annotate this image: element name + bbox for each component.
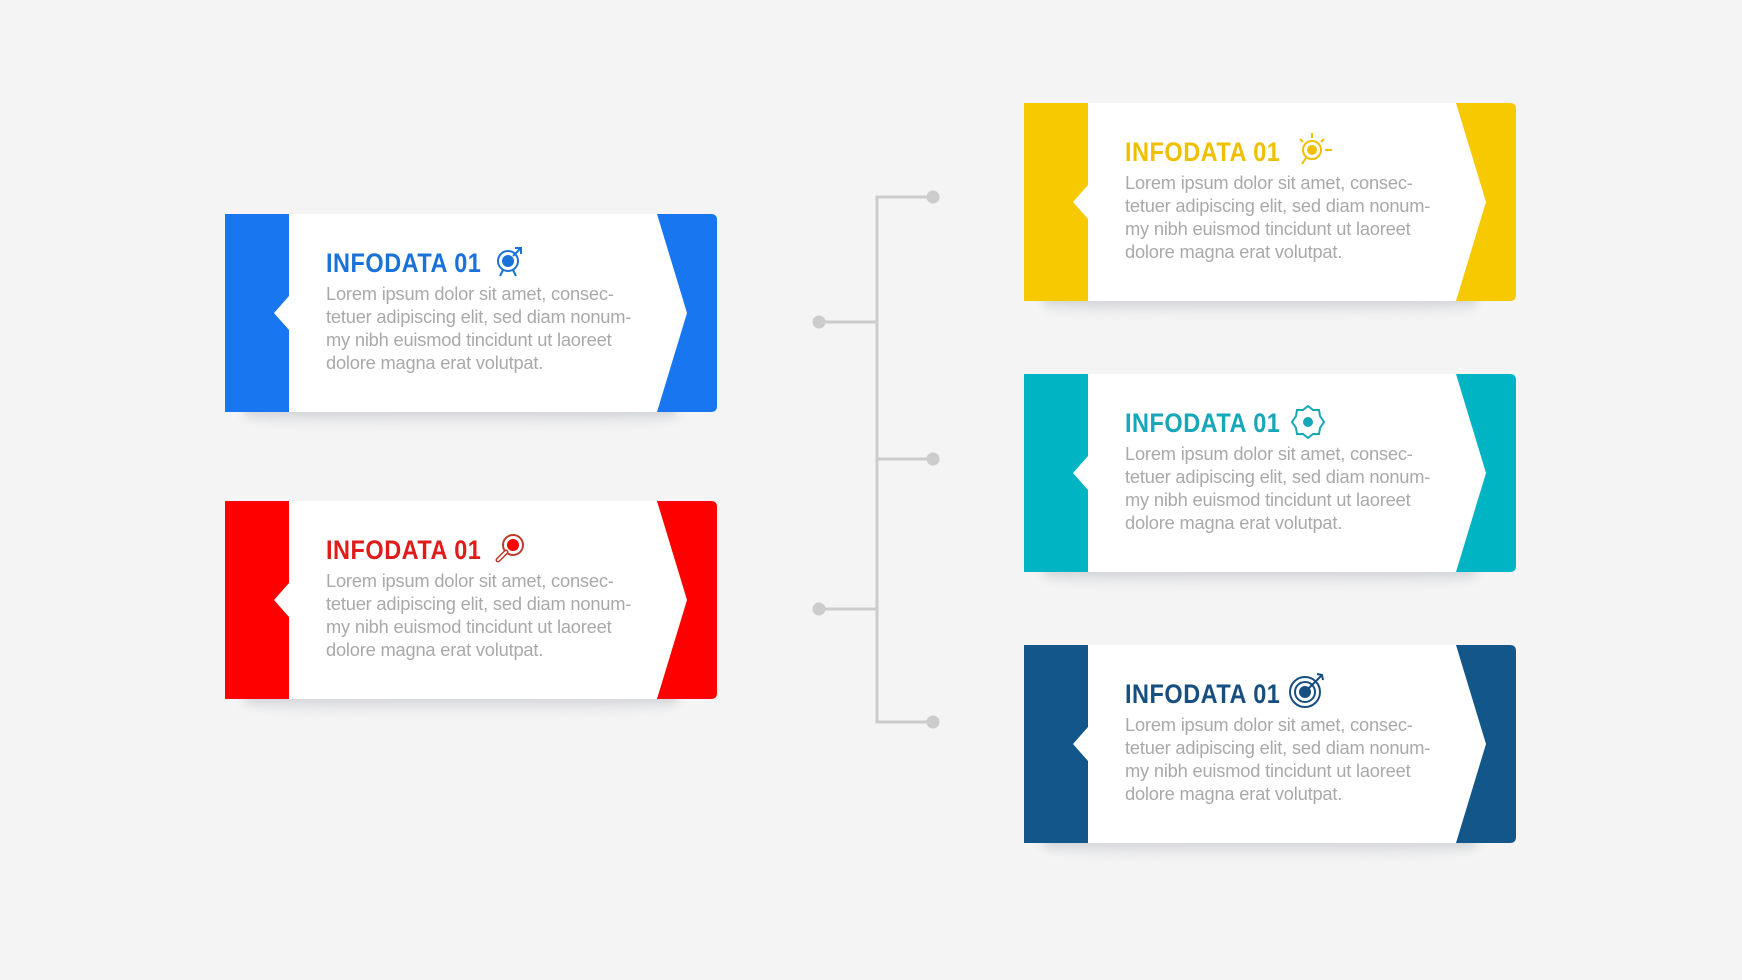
text: dolore magna erat volutpat. — [1125, 241, 1342, 262]
text: tetuer adipiscing elit, sed diam nonum- — [1125, 466, 1430, 487]
text: Lorem ipsum dolor sit amet, consec- — [326, 570, 614, 591]
text: dolore magna erat volutpat. — [326, 352, 543, 373]
card: navy — [1024, 645, 1516, 854]
icon: gear — [1290, 404, 1326, 440]
text — [326, 570, 631, 660]
title: INFODATA 01 — [1125, 679, 1280, 709]
text — [1125, 443, 1430, 533]
text: my nibh euismod tincidunt ut laoreet — [326, 329, 611, 350]
text: tetuer adipiscing elit, sed diam nonum- — [326, 593, 631, 614]
text: Lorem ipsum dolor sit amet, consec- — [1125, 714, 1413, 735]
text: Lorem ipsum dolor sit amet, consec- — [326, 283, 614, 304]
text: my nibh euismod tincidunt ut laoreet — [1125, 760, 1410, 781]
text — [1125, 172, 1430, 262]
text: dolore magna erat volutpat. — [1125, 512, 1342, 533]
card: red — [225, 501, 717, 710]
icon: target — [1289, 673, 1324, 708]
text: dolore magna erat volutpat. — [326, 639, 543, 660]
text: tetuer adipiscing elit, sed diam nonum- — [326, 306, 631, 327]
title: INFODATA 01 — [326, 248, 481, 278]
icon: target with arrow — [497, 247, 522, 276]
title: INFODATA 01 — [1125, 408, 1280, 438]
card: yellow — [1024, 103, 1516, 312]
icon: light bulb — [1299, 133, 1332, 164]
title: INFODATA 01 — [326, 535, 481, 565]
text: Lorem ipsum dolor sit amet, consec- — [1125, 443, 1413, 464]
text: dolore magna erat volutpat. — [1125, 783, 1342, 804]
text: tetuer adipiscing elit, sed diam nonum- — [1125, 737, 1430, 758]
text: my nibh euismod tincidunt ut laoreet — [1125, 218, 1410, 239]
title: INFODATA 01 — [1125, 137, 1280, 167]
text: my nibh euismod tincidunt ut laoreet — [326, 616, 611, 637]
card: teal — [1024, 374, 1516, 584]
text: Lorem ipsum dolor sit amet, consec- — [1125, 172, 1413, 193]
icon: magnifier — [496, 534, 524, 562]
text — [1125, 714, 1430, 804]
text — [326, 283, 631, 373]
text: my nibh euismod tincidunt ut laoreet — [1125, 489, 1410, 510]
card: blue — [225, 214, 717, 424]
text: tetuer adipiscing elit, sed diam nonum- — [1125, 195, 1430, 216]
